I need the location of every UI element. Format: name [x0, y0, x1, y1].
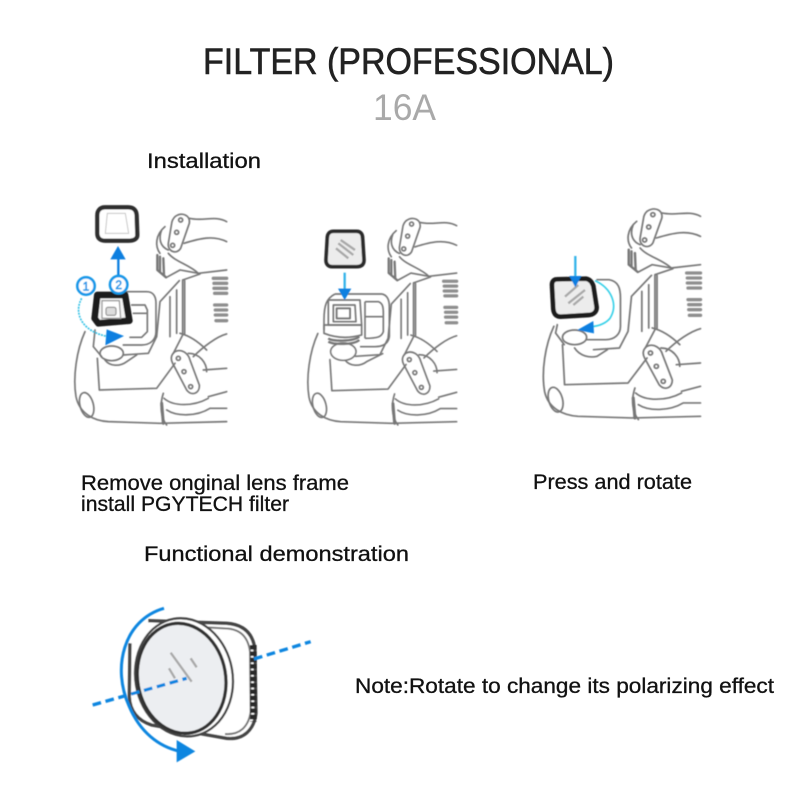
arrow rotate: [577, 281, 614, 333]
filter square frame: [129, 621, 256, 738]
arrow press down: [569, 256, 581, 287]
rotation arrow: [121, 608, 195, 762]
heading: functional demonstration: Functional demonstration: [144, 543, 409, 566]
drone line drawing 2: [308, 218, 457, 425]
title: FILTER (PROFESSIONAL): [203, 41, 614, 82]
gimbal camera: [324, 294, 389, 365]
polarizing marks: [169, 653, 197, 682]
drone line drawing 1: [75, 214, 227, 425]
caption: step 1: [81, 472, 349, 516]
caption: step 3: Press and rotate: [533, 471, 692, 494]
drone line drawing 3: [543, 209, 700, 420]
rotation arrow 1: [79, 298, 124, 345]
frame on gimbal: [95, 295, 129, 323]
removed lens frame: [97, 207, 137, 241]
heading: installation: Installation: [147, 150, 261, 173]
subtitle: 16A: 16A: [373, 87, 436, 128]
panel: step 1 remove lens frame: [75, 207, 227, 425]
illustration: rotating polarizing filter: [93, 608, 311, 762]
panel: step 3 press and rotate: [543, 209, 700, 420]
knurled edge: [243, 645, 263, 722]
filter rotated on gimbal: [552, 279, 597, 317]
step marker 2: 2: [115, 278, 122, 292]
step marker 1: 1: [83, 279, 90, 293]
axis dashed line: [93, 642, 311, 705]
arrow down: [338, 273, 351, 300]
caption: step 1: Remove onginal lens frame: [81, 472, 349, 495]
panel: step 2 install filter: [308, 218, 457, 425]
filter piece above gimbal: [326, 231, 364, 267]
step marker 2: [110, 276, 127, 293]
step marker 1: [77, 277, 95, 295]
note text: Note:Rotate to change its polarizing effect: [355, 675, 774, 698]
caption: step 1: install PGYTECH filter: [81, 493, 289, 516]
arrow up: [110, 246, 126, 280]
filter glass: [126, 610, 242, 744]
